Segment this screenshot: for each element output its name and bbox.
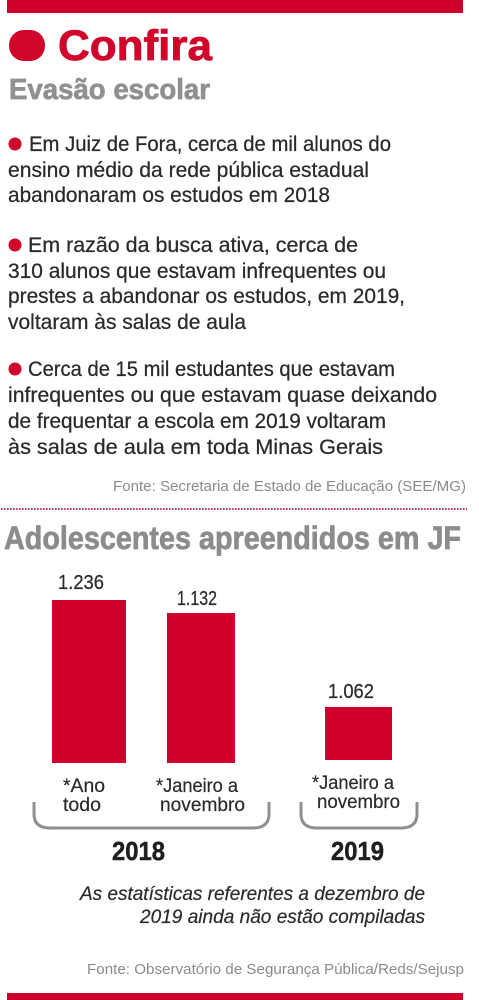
source: SEE/MG: Fonte: Secretaria de Estado de Educação (SEE/MG): [113, 478, 466, 495]
year label: 2018: 2018: [112, 836, 165, 866]
bar: 2018 whole year: [52, 572, 126, 816]
bar: 2018 January to November: [156, 588, 245, 816]
bullet item: Juiz de Fora: Em Juiz de Fora, cerca de mil alunos do: [29, 133, 391, 156]
top red bar: [7, 0, 463, 13]
bar: 2018 whole year: *Ano: [63, 776, 105, 797]
bullet item: Minas Gerais: [8, 358, 437, 459]
note: December statistics: [79, 884, 426, 928]
bar: 2018 whole year: todo: [63, 795, 101, 816]
bullet item: Minas Gerais: Cerca de 15 mil estudantes que estavam: [28, 358, 395, 381]
bracket: 2019: [301, 802, 417, 828]
subtitle: Evasão escolar: Evasão escolar: [9, 74, 210, 106]
year label: 2019: 2019: [331, 836, 384, 866]
bottom red bar: [7, 993, 463, 1000]
bar: 2019 January to November: [312, 681, 400, 813]
bullet item: busca ativa: 310 alunos que estavam infrequentes ou: [8, 260, 386, 283]
source: Sejusp: Fonte: Observatório de Segurança Pública/Reds/Sejusp: [87, 961, 464, 978]
bullet item: Minas Gerais: de frequentar a escola em 2019 voltaram: [8, 410, 386, 433]
bullet item: Minas Gerais: infrequentes ou que estavam quase deixando: [8, 384, 437, 407]
bar: 2019 January to November: 1.062: [328, 681, 374, 703]
bar: 2019 January to November: *Janeiro a: [312, 773, 394, 794]
bullet item: Juiz de Fora: [8, 133, 391, 207]
bar: 2018 January to November: *Janeiro a: [156, 776, 238, 797]
bullet item: Juiz de Fora: abandonaram os estudos em 2018: [8, 184, 330, 207]
note: December statistics: 2019 ainda não estão compiladas: [139, 907, 426, 928]
bullet item: Minas Gerais: às salas de aula em toda Minas Gerais: [8, 436, 383, 459]
bullet item: busca ativa: [8, 234, 405, 334]
note: December statistics: As estatísticas referentes a dezembro de: [79, 884, 425, 905]
bar: 2018 whole year: 1.236: [58, 572, 104, 594]
bar: 2019 January to November: novembro: [317, 792, 400, 813]
bullet item: Juiz de Fora: ensino médio da rede pública estadual: [8, 159, 369, 182]
bar: 2018 January to November: novembro: [160, 795, 245, 816]
bullet item: busca ativa: voltaram às salas de aula: [8, 311, 246, 334]
bracket: 2018: [34, 802, 269, 828]
panel: apprehended adolescents chart: [4, 520, 464, 978]
icon: red rounded blob: [9, 30, 45, 61]
bullet item: busca ativa: Em razão da busca ativa, cerca de: [28, 234, 358, 257]
bullet item: busca ativa: prestes a abandonar os estudos, em 2019,: [8, 285, 405, 308]
title: Confira: Confira: [58, 22, 213, 70]
panel: school dropout: [8, 22, 466, 495]
bar: 2018 January to November: 1.132: [177, 588, 217, 610]
